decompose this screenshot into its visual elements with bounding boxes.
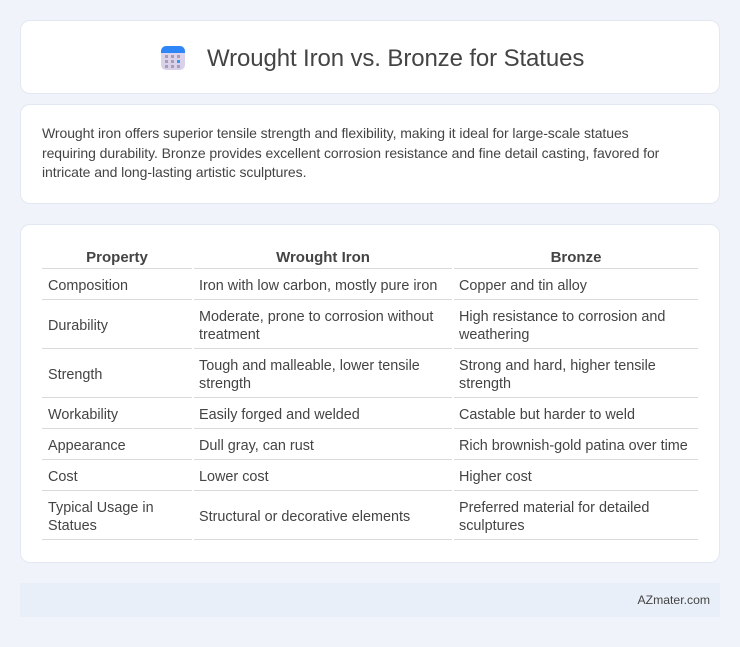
row: typical usage in statues: sculptures <box>459 518 525 534</box>
panel: comparison table <box>20 224 720 563</box>
row: durability: treatment <box>199 327 260 343</box>
row: strength <box>48 358 656 392</box>
description text: Wrought iron offers superior tensile strength and flexibility, making it ideal for large-scale statues <box>42 125 629 141</box>
row: typical usage in statues: Preferred material for detailed <box>459 500 649 516</box>
row: durability: weathering <box>459 327 529 343</box>
column headers: Property <box>86 249 148 266</box>
row: typical usage in statues <box>48 500 649 534</box>
row: typical usage in statues: Structural or decorative elements <box>199 509 410 525</box>
row: workability: Castable but harder to weld <box>459 407 635 423</box>
row: strength: Strong and hard, higher tensile <box>459 358 656 374</box>
description text: intricate and long-lasting artistic sculptures. <box>42 164 306 180</box>
row: cost <box>48 469 532 485</box>
row: strength: strength <box>199 376 251 392</box>
panel: description <box>20 104 720 204</box>
row: strength: strength <box>459 376 511 392</box>
row: durability: Moderate, prone to corrosion without <box>199 309 433 325</box>
row: appearance: Rich brownish-gold patina over time <box>459 438 688 454</box>
row: cost: Lower cost <box>199 469 269 485</box>
column headers <box>86 249 601 266</box>
row: workability: Easily forged and welded <box>199 407 360 423</box>
row: workability <box>48 407 635 423</box>
title: Wrought Iron vs. Bronze for Statues <box>207 45 584 72</box>
row: durability: Durability <box>48 318 108 334</box>
row: typical usage in statues: Statues <box>48 518 97 534</box>
row: composition: Composition <box>48 278 128 294</box>
row: strength: Tough and malleable, lower tensile <box>199 358 420 374</box>
row: cost: Higher cost <box>459 469 532 485</box>
row: composition <box>48 278 587 294</box>
row: cost: Cost <box>48 469 78 485</box>
row: durability <box>48 309 665 343</box>
row: composition: Iron with low carbon, mostly pure iron <box>199 278 437 294</box>
column headers: Bronze <box>551 249 601 266</box>
footer brand text: AZmater.com <box>638 593 710 607</box>
row: workability: Workability <box>48 407 118 423</box>
row: composition: Copper and tin alloy <box>459 278 587 294</box>
row: typical usage in statues: Typical Usage in <box>48 500 154 516</box>
description text <box>42 125 660 180</box>
icon: calendar <box>161 46 185 70</box>
row: strength: Strength <box>48 367 102 383</box>
row: appearance: Appearance <box>48 438 126 454</box>
row: appearance: Dull gray, can rust <box>199 438 314 454</box>
panel: header <box>20 20 720 94</box>
row lines <box>42 268 698 540</box>
row: appearance <box>48 438 688 454</box>
footer bar <box>20 583 720 617</box>
column headers: Wrought Iron <box>276 249 370 266</box>
table: comparison <box>42 249 698 540</box>
row: durability: High resistance to corrosion and <box>459 309 665 325</box>
description text: requiring durability. Bronze provides excellent corrosion resistance and fine detail casting, favored for <box>42 145 659 161</box>
